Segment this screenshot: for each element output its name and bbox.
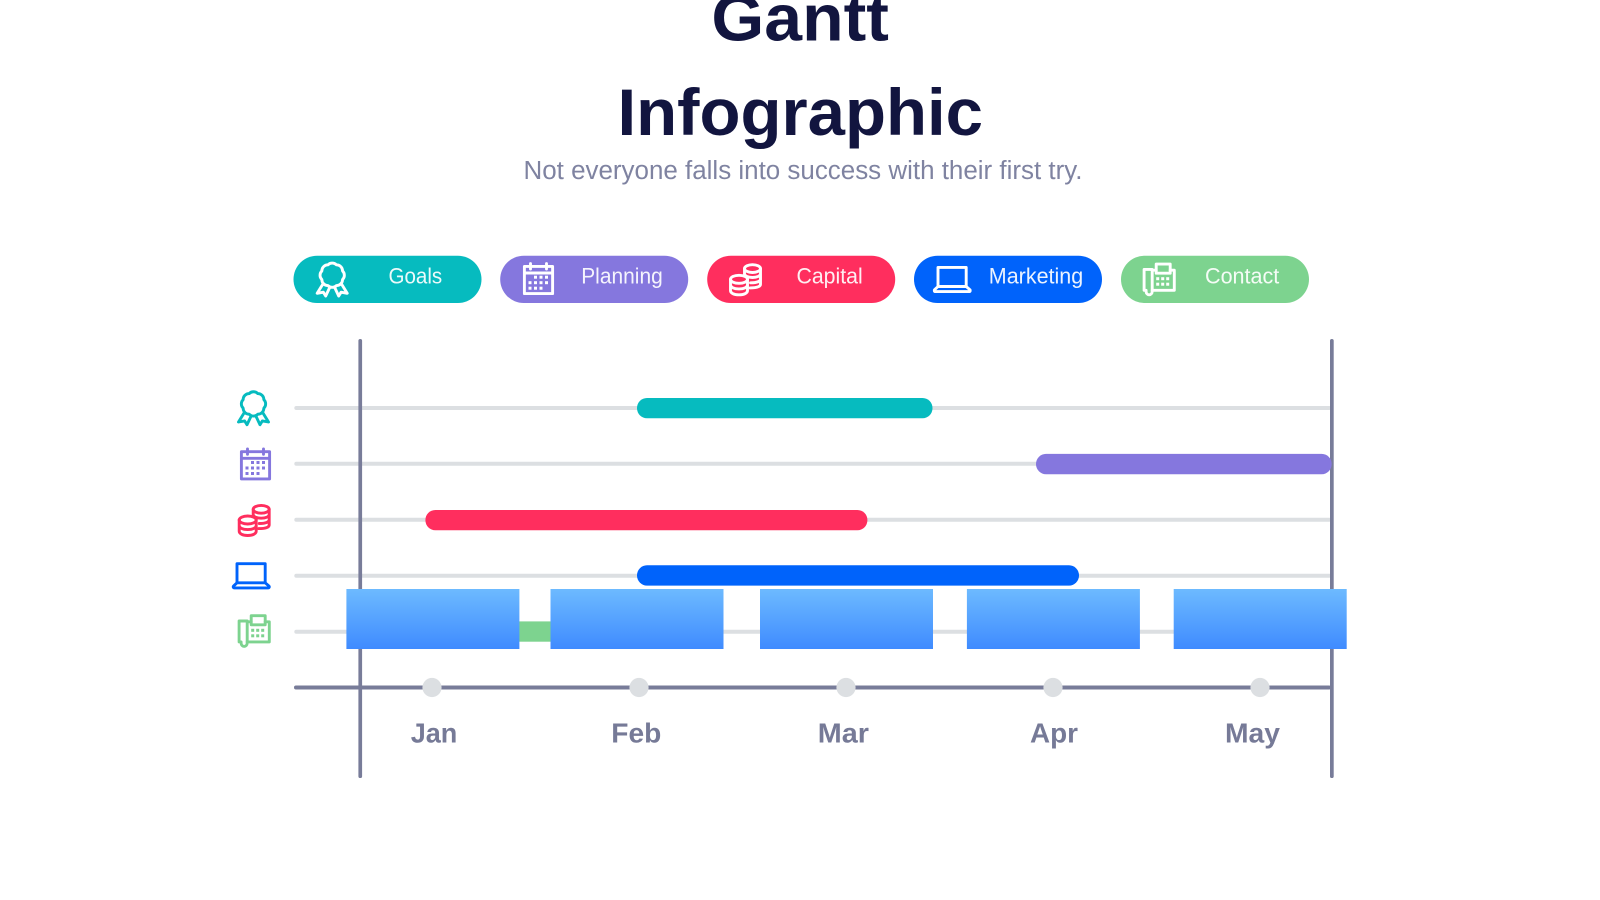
bar: planning <box>1036 454 1332 474</box>
month labels: Apr <box>1030 718 1078 749</box>
right axis <box>1330 339 1334 778</box>
month labels <box>411 718 1280 749</box>
legend pill: Contact: Contact <box>1205 263 1279 288</box>
legend pill: Planning <box>500 256 688 303</box>
legend pill: Planning: Planning <box>581 263 663 288</box>
timeline <box>294 678 1331 749</box>
gantt chart <box>233 339 1347 778</box>
subtitle: Not everyone falls into success with their first try. <box>524 157 1082 185</box>
row icon: goals <box>238 392 268 425</box>
legend pill: Capital: Capital <box>796 263 863 288</box>
title <box>618 0 983 149</box>
legend pill: Marketing: Marketing <box>989 263 1083 288</box>
bar: marketing <box>637 565 1079 586</box>
left axis <box>358 339 362 778</box>
month labels: Mar <box>818 718 869 749</box>
row icon: planning <box>241 449 270 479</box>
month labels: Feb <box>611 718 661 749</box>
row icon: marketing <box>233 564 269 588</box>
legend <box>294 256 1309 303</box>
row icon: capital <box>239 505 269 536</box>
month labels: May <box>1225 718 1280 749</box>
legend pill: Goals <box>294 256 482 303</box>
legend pill: Capital <box>707 256 895 303</box>
month labels: Jan <box>411 718 457 749</box>
legend pill: Contact <box>1121 256 1309 303</box>
row icon: contact <box>239 616 269 646</box>
overlay blocks <box>346 589 1347 649</box>
legend pill: Marketing <box>914 256 1102 303</box>
title: Infographic <box>618 75 983 149</box>
bar: capital <box>425 510 867 530</box>
legend pill: Goals: Goals <box>388 263 442 288</box>
bar: goals <box>637 398 932 418</box>
bar: contact <box>500 621 570 642</box>
